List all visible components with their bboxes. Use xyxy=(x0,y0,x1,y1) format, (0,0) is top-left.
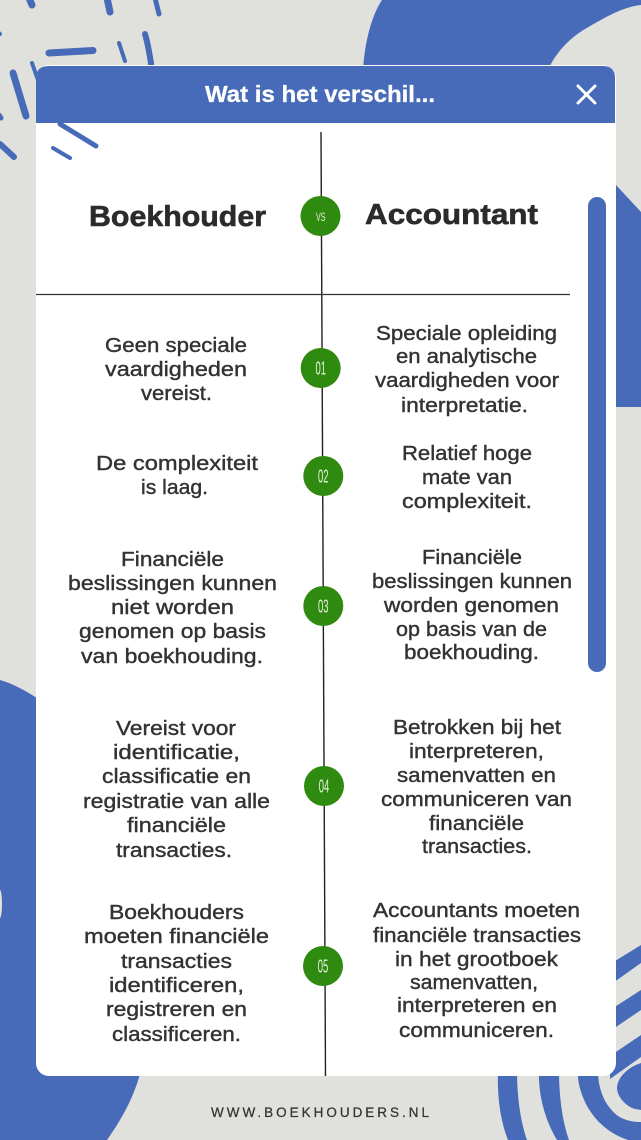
heading: Accountant: Accountant xyxy=(365,199,538,231)
left text 5: registreren en xyxy=(106,999,247,1021)
left text 3: genomen op basis xyxy=(79,621,266,643)
left text 1: Geen speciale xyxy=(105,335,247,357)
right text 1 xyxy=(375,323,559,417)
left text 5: classificeren. xyxy=(112,1024,241,1046)
right text 1: vaardigheden voor xyxy=(375,370,559,392)
badge: 01 xyxy=(301,348,341,388)
badge: 05 xyxy=(303,946,343,986)
right text 3: boekhouding. xyxy=(404,642,539,664)
decoration: top right blob xyxy=(363,0,641,70)
badge: 04 xyxy=(304,766,344,806)
left text 5: Boekhouders xyxy=(109,902,244,924)
decoration: dashes over card xyxy=(53,124,96,158)
decoration: bottom left blob xyxy=(0,680,141,1140)
badge: 02 xyxy=(303,456,343,496)
left text 3: beslissingen kunnen xyxy=(68,573,277,595)
right text 3: beslissingen kunnen xyxy=(372,571,572,593)
badge: 03 xyxy=(303,586,343,626)
right text 4: financiële xyxy=(429,813,524,835)
left text 3: Financiële xyxy=(121,549,224,571)
left text 2: De complexiteit xyxy=(96,453,259,475)
left text 5: moeten financiële xyxy=(84,926,269,948)
left text 1: vaardigheden xyxy=(105,359,247,381)
scrollbar xyxy=(588,197,606,672)
right text 4: transacties. xyxy=(422,836,532,858)
badge: 02: 02 xyxy=(318,466,328,486)
right text 2 xyxy=(402,443,532,513)
right text 5: financiële transacties xyxy=(373,925,581,947)
right text 3 xyxy=(372,547,572,664)
left text 4: registratie van alle xyxy=(83,791,270,813)
right text 5: Accountants moeten xyxy=(373,900,580,922)
footer website: WWW.BOEKHOUDERS.NL xyxy=(211,1105,429,1120)
right text 1: en analytische xyxy=(396,346,537,368)
heading divider xyxy=(36,294,570,296)
left text 5: identificeren, xyxy=(109,975,244,997)
right text 4 xyxy=(381,717,572,858)
left text 2 xyxy=(96,453,259,499)
left text 4: financiële xyxy=(127,815,226,837)
badge: 05: 05 xyxy=(318,956,328,976)
right text 3: op basis van de xyxy=(396,619,547,641)
left text 5: transacties xyxy=(121,951,232,973)
right text 2: mate van xyxy=(422,467,512,489)
right text 4: interpreteren, xyxy=(409,741,544,763)
decoration: top left dashes xyxy=(0,0,159,157)
left text 4: classificatie en xyxy=(102,766,251,788)
left text 4: identificatie, xyxy=(113,742,240,764)
left text 4: Vereist voor xyxy=(116,718,236,740)
right text 3: Financiële xyxy=(422,547,522,569)
title: Wat is het verschil... xyxy=(205,81,435,107)
right text 4: samenvatten en xyxy=(397,765,556,787)
badge: VS xyxy=(300,196,340,236)
right text 5: in het grootboek xyxy=(395,949,559,971)
left text 3: van boekhouding. xyxy=(81,646,263,668)
icon: close xyxy=(578,86,595,103)
right text 5 xyxy=(373,900,581,1042)
left text 4 xyxy=(83,718,270,862)
badge: 03: 03 xyxy=(318,596,328,616)
right text 2: complexiteit. xyxy=(402,491,532,513)
decoration: right side shape xyxy=(610,180,641,407)
decoration: bottom right stripes and arcs xyxy=(498,945,641,1140)
right text 5: samenvatten, xyxy=(410,972,538,994)
left text 5 xyxy=(84,902,269,1046)
heading: Boekhouder: Boekhouder xyxy=(89,201,266,233)
badge: 04: 04 xyxy=(319,776,329,796)
right text 5: communiceren. xyxy=(399,1020,554,1042)
right text 5: interpreteren en xyxy=(397,995,557,1017)
right text 2: Relatief hoge xyxy=(402,443,532,465)
header bar xyxy=(36,66,615,123)
left text 4: transacties. xyxy=(116,840,232,862)
timeline vertical line xyxy=(321,132,326,1076)
left text 3: niet worden xyxy=(111,597,234,619)
right text 4: communiceren van xyxy=(381,789,572,811)
right text 3: worden genomen xyxy=(383,595,559,617)
right text 1: interpretatie. xyxy=(401,395,528,417)
left text 3 xyxy=(68,549,277,668)
right text 1: Speciale opleiding xyxy=(376,323,557,345)
badge: VS: VS xyxy=(316,210,326,224)
left text 1 xyxy=(105,335,247,405)
left text 2: is laag. xyxy=(141,477,208,499)
left text 1: vereist. xyxy=(141,383,212,405)
badge: 01: 01 xyxy=(316,358,326,378)
right text 4: Betrokken bij het xyxy=(393,717,561,739)
